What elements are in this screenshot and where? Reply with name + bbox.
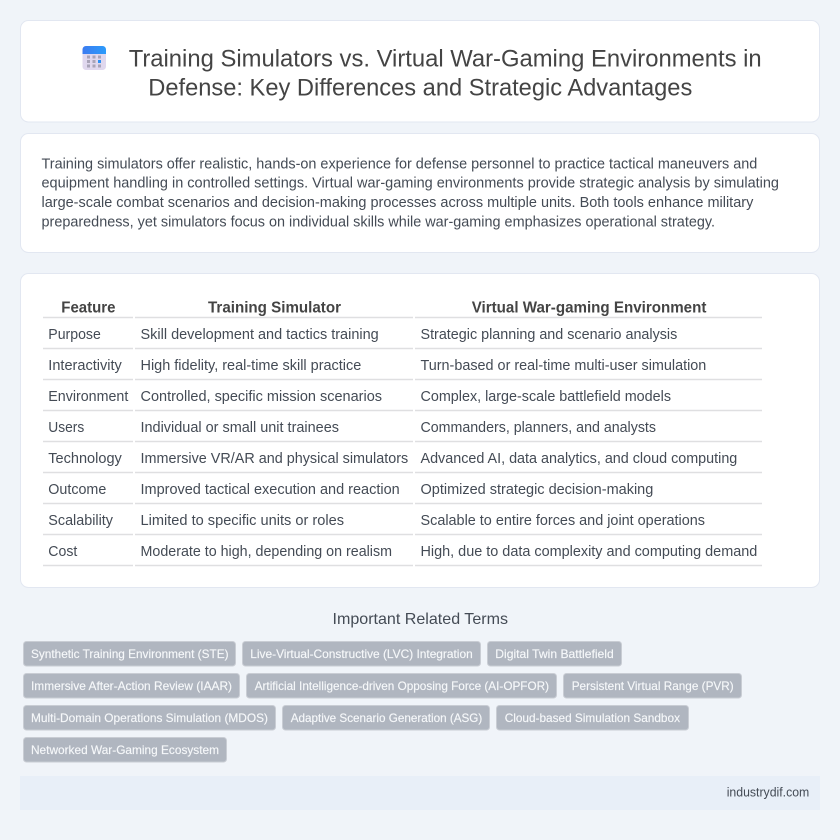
icon: calendar [82, 46, 106, 70]
summary paragraph: Training simulators offer realistic, hands-on experience for defense personnel to practice tactical maneuvers and [42, 156, 757, 172]
panel: comparison table [20, 274, 820, 588]
row: Technology [48, 451, 737, 467]
title [129, 46, 762, 102]
row: Users [48, 420, 656, 436]
row: Scalability [48, 513, 705, 529]
chip: Cloud-based Simulation Sandbox: Cloud-based Simulation Sandbox [505, 711, 680, 725]
chip: Multi-Domain Operations Simulation: Multi-Domain Operations Simulation (MDOS) [31, 711, 268, 725]
row: Scalability: Scalable to entire forces and joint operations [420, 513, 705, 529]
heading: Important Related Terms: Important Related Terms [332, 611, 508, 628]
row: Users: Individual or small unit trainees [140, 420, 339, 436]
chip: Cloud-based Simulation Sandbox [496, 706, 688, 730]
chip: Persistent Virtual Range [564, 674, 742, 698]
title: Defense: Key Differences and Strategic Advantages [148, 75, 692, 102]
row: Outcome [48, 482, 653, 498]
row: Purpose: Purpose [48, 327, 101, 343]
chip: Networked War-Gaming Ecosystem: Networked War-Gaming Ecosystem [31, 743, 219, 757]
summary paragraph: equipment handling in controlled settings. Virtual war-gaming environments provide strategic analysis by simulating [42, 176, 779, 192]
title: Training Simulators vs. Virtual War-Gaming Environments in [129, 46, 762, 73]
row: Technology: Advanced AI, data analytics, and cloud computing [420, 451, 737, 467]
row: Technology: Technology [48, 451, 123, 467]
table row rules [43, 318, 762, 566]
row: Interactivity: High fidelity, real-time skill practice [140, 358, 361, 374]
footer source: industrydif.com [727, 785, 809, 800]
row: Scalability: Scalability [48, 513, 114, 529]
summary paragraph: large-scale combat scenarios and decision-making processes across multiple units. Both tools enhance military [42, 195, 754, 211]
panel: summary text [20, 134, 820, 252]
table header row: Feature [61, 299, 116, 316]
row: Purpose: Strategic planning and scenario analysis [420, 327, 677, 343]
summary paragraph: preparedness, yet simulators focus on individual skills while war-gaming emphasizes operational strategy. [42, 215, 715, 231]
row: Outcome: Optimized strategic decision-making [420, 482, 653, 498]
row: Environment [48, 389, 671, 405]
row: Interactivity [48, 358, 706, 374]
chip: Adaptive Scenario Generation [282, 706, 490, 730]
chip: Multi-Domain Operations Simulation [24, 706, 276, 730]
chip: AI-driven Opposing Force [246, 674, 556, 698]
row: Environment: Environment [48, 389, 128, 405]
table header row [61, 299, 706, 316]
chip: Digital Twin Battlefield: Digital Twin Battlefield [495, 647, 614, 661]
chip: Live-Virtual-Constructive: Live-Virtual-Constructive (LVC) Integration [250, 647, 473, 661]
row: Purpose: Skill development and tactics training [140, 327, 379, 343]
table header row: Training Simulator [208, 299, 341, 316]
chip: Synthetic Training Environment [24, 642, 236, 666]
row: Environment: Complex, large-scale battlefield models [420, 389, 671, 405]
chip: AI-driven Opposing Force: Artificial Intelligence-driven Opposing Force (AI-OPFOR) [255, 679, 549, 693]
summary paragraph [42, 156, 779, 231]
chip: Networked War-Gaming Ecosystem [24, 738, 226, 762]
row: Interactivity: Interactivity [48, 358, 123, 374]
row: Cost [48, 544, 757, 560]
row: Cost: High, due to data complexity and computing demand [420, 544, 757, 560]
row: Users: Commanders, planners, and analysts [420, 420, 656, 436]
row: Interactivity: Turn-based or real-time multi-user simulation [420, 358, 706, 374]
footer band [20, 776, 820, 810]
row: Scalability: Limited to specific units or roles [140, 513, 344, 529]
chip: Digital Twin Battlefield [488, 642, 622, 666]
row: Cost: Cost [48, 544, 77, 560]
chip: Persistent Virtual Range: Persistent Virtual Range (PVR) [572, 679, 734, 693]
row: Outcome: Improved tactical execution and reaction [140, 482, 400, 498]
chip: Synthetic Training Environment: Synthetic Training Environment (STE) [31, 647, 229, 661]
row: Purpose [48, 327, 677, 343]
related terms chips [24, 642, 742, 762]
table header row: Virtual War-gaming Environment [472, 299, 706, 316]
row: Environment: Controlled, specific mission scenarios [140, 389, 382, 405]
panel: header [20, 20, 820, 122]
row: Cost: Moderate to high, depending on realism [140, 544, 392, 560]
chip: Immersive After-Action Review [24, 674, 240, 698]
row: Outcome: Outcome [48, 482, 106, 498]
chip: Adaptive Scenario Generation: Adaptive Scenario Generation (ASG) [291, 711, 482, 725]
row: Technology: Immersive VR/AR and physical simulators [140, 451, 408, 467]
chip: Live-Virtual-Constructive [242, 642, 480, 666]
row: Users: Users [48, 420, 84, 436]
chip: Immersive After-Action Review: Immersive After-Action Review (IAAR) [31, 679, 232, 693]
